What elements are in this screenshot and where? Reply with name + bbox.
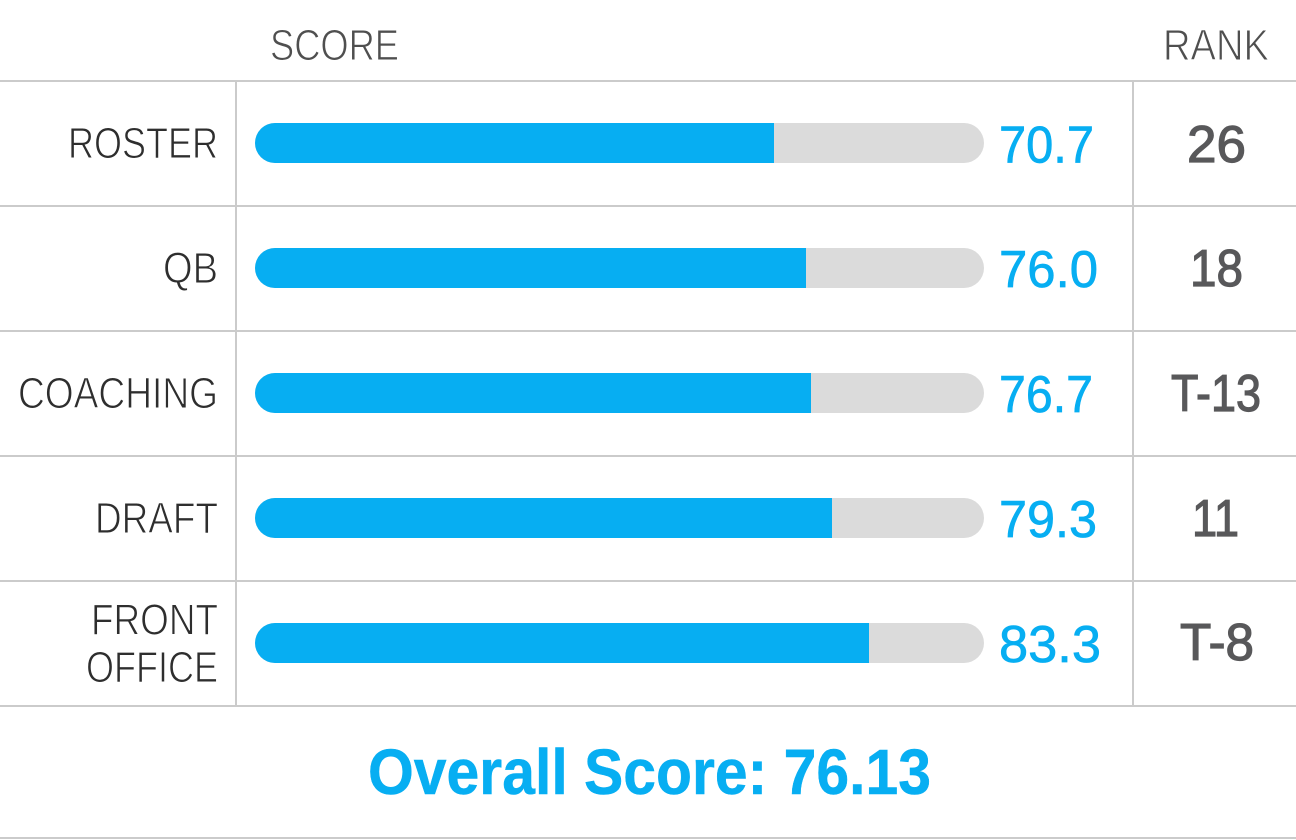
row: coaching <box>18 365 1261 424</box>
rank: draft: 11 <box>1192 490 1239 548</box>
bar: roster 70.7 <box>255 123 984 163</box>
bar: draft 79.3 <box>255 498 984 538</box>
rank: qb: 18 <box>1190 240 1243 298</box>
score: qb: 76.0 <box>999 241 1098 299</box>
label: front office: FRONT <box>91 596 218 644</box>
score: roster: 70.7 <box>999 116 1094 174</box>
rank: roster: 26 <box>1187 116 1246 174</box>
rank: front office: T-8 <box>1180 614 1254 672</box>
label: qb: QB <box>163 245 218 293</box>
label: coaching: COACHING <box>18 370 218 418</box>
label: front office: OFFICE <box>86 644 218 692</box>
label: draft: DRAFT <box>95 495 218 543</box>
row: roster <box>68 116 1246 174</box>
score: front office: 83.3 <box>999 616 1101 674</box>
row: front office <box>86 596 1254 692</box>
label: front office <box>86 596 218 692</box>
row: draft <box>95 490 1239 549</box>
bar: qb 76.0 <box>255 248 984 288</box>
score: coaching: 76.7 <box>999 366 1093 424</box>
label: roster: ROSTER <box>68 120 218 168</box>
rank: coaching: T-13 <box>1171 365 1261 423</box>
score: draft: 79.3 <box>999 491 1097 549</box>
column heading: score: SCORE <box>270 22 399 70</box>
bar: front office 83.3 <box>255 623 984 663</box>
row: qb <box>163 240 1243 299</box>
column heading: rank: RANK <box>1163 22 1269 70</box>
bar: coaching 76.7 <box>255 373 984 413</box>
overall score: Overall Score: 76.13 <box>368 736 931 808</box>
